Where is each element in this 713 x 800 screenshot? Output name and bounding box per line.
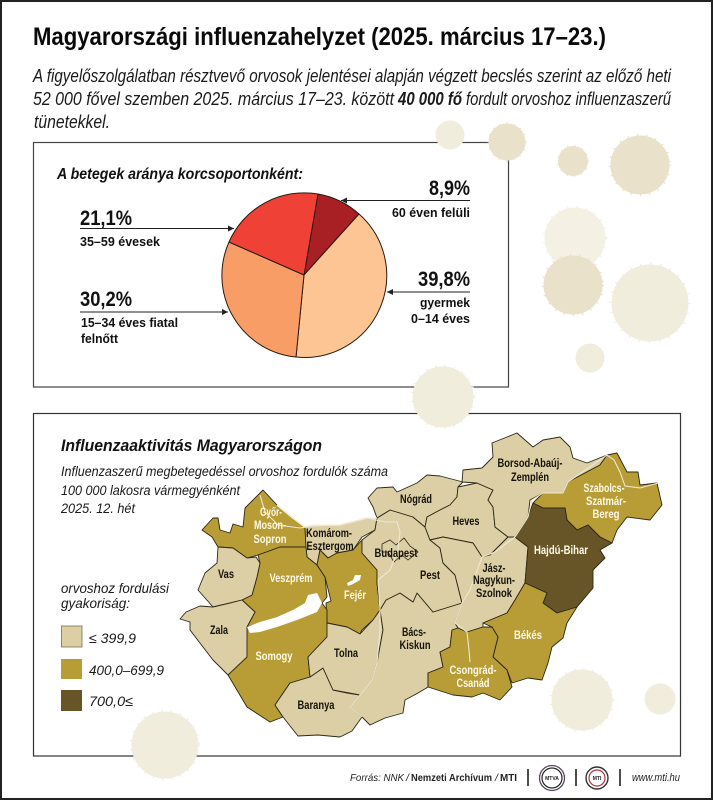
county: Komárom-Esztergom xyxy=(305,518,377,565)
county: Borsod-Abaúj-Zemplén xyxy=(462,433,607,537)
lake: Velence xyxy=(347,575,361,586)
icon: virus 11 xyxy=(645,684,675,714)
map labels: Csanád xyxy=(456,678,490,690)
map labels: Moson- xyxy=(254,520,286,532)
map heading: Influenzaaktivitás Magyarországon xyxy=(61,436,322,455)
intro text xyxy=(32,65,672,132)
source line: MTI xyxy=(500,772,517,784)
map labels: Tolna xyxy=(334,648,358,660)
county: Baranya xyxy=(275,668,362,737)
map labels: Nagykun- xyxy=(473,575,515,587)
slice: children xyxy=(296,214,387,357)
source line: / xyxy=(405,772,410,784)
label: 30,2%: felnőtt xyxy=(81,332,119,346)
icon: MTI logo: MTI xyxy=(593,776,602,782)
map labels: Fejér xyxy=(344,590,366,602)
map labels: Szolnok xyxy=(476,588,512,600)
map subtitle: 2025. 12. hét xyxy=(60,501,136,516)
icon: virus 9 xyxy=(412,366,474,428)
slice: 35-59 xyxy=(229,193,318,275)
panel: age group frame xyxy=(34,142,508,387)
label: 30,2%: 30,2% xyxy=(80,288,132,311)
legend: 700,0≤ xyxy=(89,693,133,709)
map subtitle: 100 000 lakosra vármegyénként xyxy=(61,483,241,498)
map labels: Csongrád- xyxy=(450,665,497,677)
source line: / xyxy=(494,772,499,784)
legend: orvoshoz fordulási xyxy=(61,580,170,596)
slice: 60 years and over xyxy=(304,194,359,275)
icon: virus 3 xyxy=(558,146,588,176)
title: Magyarországi influenzahelyzet (2025. március 17–23.) xyxy=(33,23,606,51)
intro text: 40 000 fő xyxy=(397,88,463,109)
map labels: Komárom- xyxy=(306,528,352,540)
county: Pest xyxy=(362,510,462,612)
legend: ≤ 399,9 xyxy=(89,630,136,646)
county: Zala xyxy=(180,600,255,675)
map labels: Nógrád xyxy=(400,494,432,506)
map labels: Békés xyxy=(514,630,542,642)
county: Veszprém xyxy=(242,547,327,627)
slice: young adults xyxy=(222,242,304,357)
river: Danube xyxy=(260,495,400,717)
label: 8,9%: 60 éven felüli xyxy=(392,206,470,220)
map labels: Sopron xyxy=(254,534,286,546)
map labels: Vas xyxy=(218,569,234,581)
panel: map frame xyxy=(34,414,680,756)
county: Nógrád xyxy=(368,475,463,527)
map labels: Hajdú-Bihar xyxy=(534,545,588,557)
label: 8,9%: 8,9% xyxy=(429,177,470,200)
county: Békés xyxy=(483,583,577,683)
county: Hajdú-Bihar xyxy=(515,503,612,613)
icon: virus 12 xyxy=(131,711,199,779)
map labels xyxy=(210,458,626,712)
county: Jász-Nagykun-Szolnok xyxy=(430,537,528,632)
label: 21,1%: 35–59 évesek xyxy=(80,235,160,249)
county: Tolna xyxy=(308,610,383,695)
Budapest outline xyxy=(382,538,418,562)
legend xyxy=(61,580,170,711)
label: 39,8%: gyermek xyxy=(420,296,470,310)
map labels: Bács- xyxy=(402,627,426,639)
intro text: tünetekkel. xyxy=(34,111,110,132)
icon: virus 10 xyxy=(551,669,613,731)
map subtitle xyxy=(60,464,388,516)
icon: virus 7 xyxy=(611,264,689,342)
icon: virus 4 xyxy=(610,135,670,195)
icon: virus 8 xyxy=(576,344,604,372)
map labels: Veszprém xyxy=(270,573,312,585)
map of Hungary xyxy=(180,433,662,737)
label: 30,2% xyxy=(80,288,228,346)
source line: Nemzeti Archívum xyxy=(411,772,492,784)
icon: virus 1 xyxy=(436,121,464,149)
icon: virus 2 xyxy=(488,124,526,160)
label: 21,1%: 21,1% xyxy=(80,207,132,230)
county: Szabolcs-Szatmár-Bereg xyxy=(533,453,662,543)
map labels: Esztergom xyxy=(306,541,354,553)
label: 30,2%: 15–34 éves fiatal xyxy=(81,316,178,330)
county: Csongrád-Csanád xyxy=(428,627,512,700)
label: 39,8%: 39,8% xyxy=(418,268,470,291)
map labels: Szabolcs- xyxy=(584,483,625,495)
website: www.mti.hu xyxy=(632,772,680,784)
river: Tisza xyxy=(455,455,658,662)
intro text: 52 000 fővel szemben 2025. március 17–23. között xyxy=(33,88,395,109)
map labels: Kiskun xyxy=(400,640,430,652)
map labels: Zemplén xyxy=(511,472,549,484)
map labels: Heves xyxy=(452,516,480,528)
county: Bács-Kiskun xyxy=(350,593,462,725)
separators xyxy=(528,769,620,786)
pie chart xyxy=(222,193,387,357)
source line: Forrás: NNK xyxy=(350,772,405,784)
icon: MTVA logo xyxy=(540,766,564,790)
legend: 400,0–699,9 xyxy=(89,662,164,678)
icon: virus 6 xyxy=(543,255,603,315)
map labels: Bereg xyxy=(592,509,620,521)
label: 8,9% xyxy=(341,177,470,220)
panel heading: age groups: A betegek aránya korcsoportonként: xyxy=(56,166,303,183)
map labels: Zala xyxy=(210,625,228,637)
map subtitle: Influenzaszerű megbetegedéssel orvoshoz fordulók száma xyxy=(61,464,388,479)
northern border along the Danube xyxy=(277,505,377,527)
map labels: Somogy xyxy=(256,651,293,663)
map labels: Borsod-Abaúj- xyxy=(498,458,563,470)
lake: Balaton xyxy=(247,593,322,633)
icon: MTVA logo: MTVA xyxy=(545,776,559,782)
county: Heves xyxy=(425,483,508,557)
icon: virus 5 xyxy=(544,207,606,269)
county: Somogy xyxy=(228,603,327,722)
county: Vas xyxy=(198,547,260,607)
source line xyxy=(350,772,517,784)
map labels: Győr- xyxy=(260,507,282,519)
label: 39,8% xyxy=(387,268,470,326)
map labels: Budapest xyxy=(374,548,418,560)
map labels: Pest xyxy=(420,570,440,582)
label: 21,1% xyxy=(80,207,234,249)
county: Győr-Moson-Sopron xyxy=(202,490,306,558)
map labels: Baranya xyxy=(298,700,335,712)
map labels: Jász- xyxy=(482,563,506,575)
county: Fejér xyxy=(317,540,380,634)
icon: MTI logo xyxy=(586,767,608,789)
legend: gyakoriság: xyxy=(61,595,130,611)
label: 39,8%: 0–14 éves xyxy=(411,312,470,326)
map labels: Szatmár- xyxy=(586,496,626,508)
